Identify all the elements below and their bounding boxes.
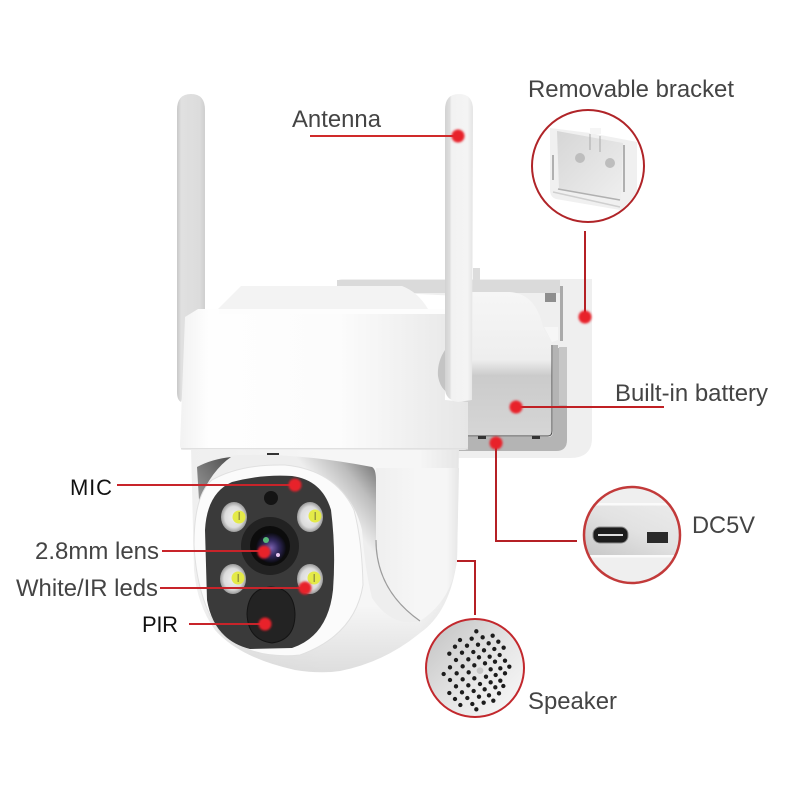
leader: removable bracket xyxy=(578,231,592,324)
front black face panel xyxy=(205,476,334,649)
label: PIR: PIR xyxy=(142,612,178,637)
label: MIC: MIC xyxy=(70,475,112,500)
PIR sensor xyxy=(247,587,295,643)
white/IR LEDs xyxy=(220,502,323,594)
right antenna xyxy=(438,94,480,402)
callout circle: DC5V port xyxy=(580,486,690,584)
leader: speaker xyxy=(457,561,475,615)
callout circle: speaker grille xyxy=(426,619,524,717)
callout circle: removable bracket xyxy=(532,110,644,222)
mic hole xyxy=(264,491,278,505)
recess behind the head xyxy=(197,455,420,622)
camera upper housing xyxy=(180,286,468,450)
left antenna xyxy=(177,94,205,402)
label: Antenna: Antenna xyxy=(292,106,382,133)
label: White/IR leds: White/IR leds xyxy=(16,575,158,602)
bracket housing xyxy=(337,279,592,458)
white bezel around face xyxy=(194,465,363,656)
label: Built-in battery: Built-in battery xyxy=(615,380,768,407)
label: Removable bracket: Removable bracket xyxy=(528,76,734,103)
leader: DC5V xyxy=(490,436,577,541)
label: DC5V: DC5V xyxy=(692,512,755,539)
lens xyxy=(241,517,299,575)
camera ball body xyxy=(191,448,459,672)
leader: antenna xyxy=(310,130,464,142)
label: 2.8mm lens: 2.8mm lens xyxy=(35,538,159,565)
leader: built-in battery xyxy=(510,400,664,414)
arm of the yoke xyxy=(376,468,459,621)
leader: lens xyxy=(162,546,270,558)
leader: LEDs xyxy=(160,582,312,594)
leader: PIR xyxy=(189,618,272,630)
leader: MIC xyxy=(117,478,302,492)
label: Speaker: Speaker xyxy=(528,688,617,715)
